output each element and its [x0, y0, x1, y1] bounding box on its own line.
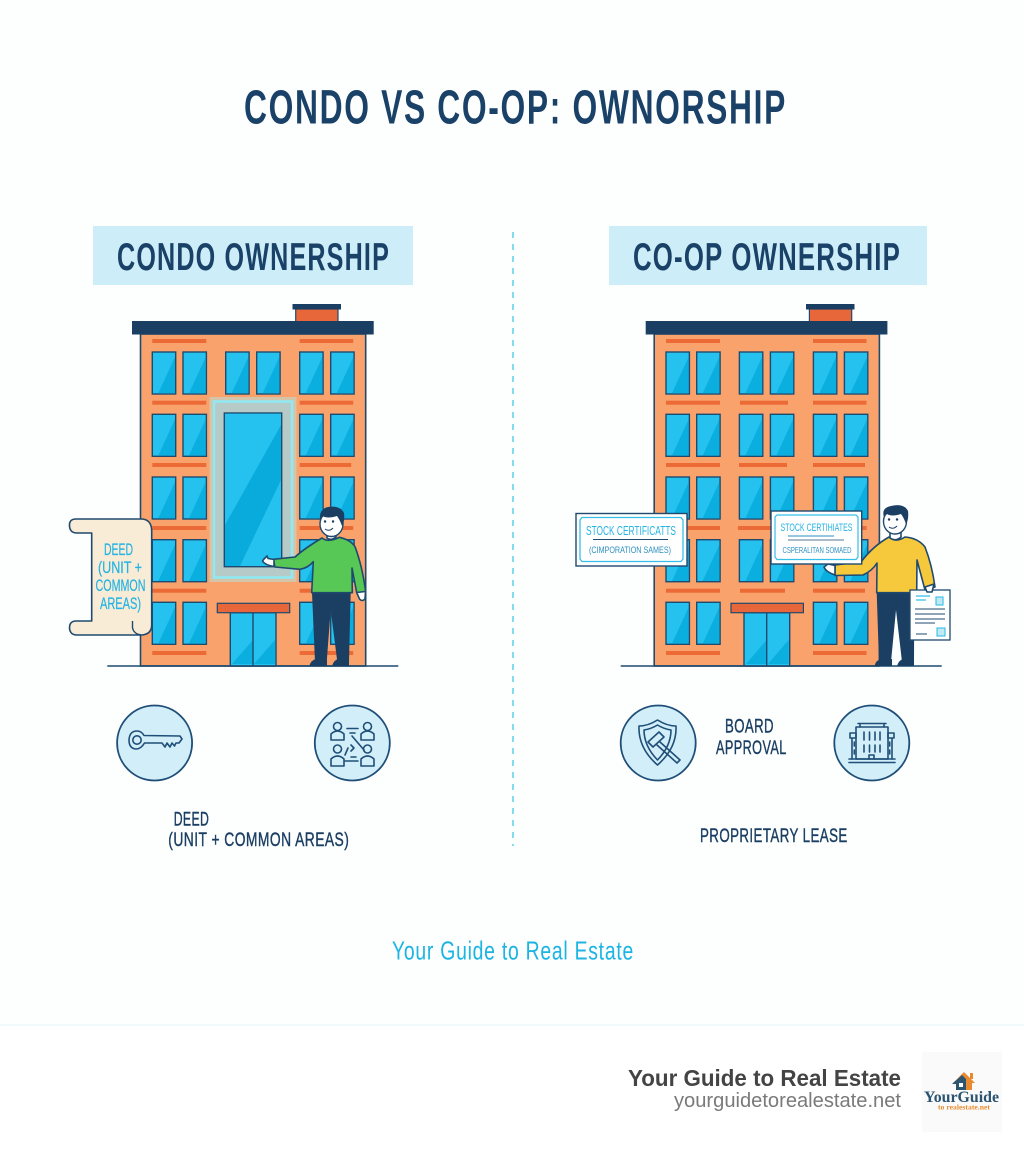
person in yellow sweater [824, 505, 935, 666]
logo [922, 1052, 1002, 1132]
trousers [312, 593, 351, 662]
sweater [835, 537, 935, 593]
floor bands [152, 339, 353, 655]
deed scroll text: AREAS) [100, 594, 141, 613]
label: deed: (UNIT + COMMON AREAS) [168, 830, 349, 851]
windows [152, 352, 354, 644]
hands [262, 556, 366, 600]
logo tagline: to realestate.net [938, 1102, 991, 1112]
windows [666, 352, 868, 644]
right stock certificate [771, 511, 862, 564]
tagline: Your Guide to Real Estate [392, 936, 634, 966]
heading: co-op ownership [609, 226, 927, 285]
hair [883, 505, 908, 524]
left stock certificate [576, 514, 687, 566]
building body [140, 334, 366, 666]
head [890, 530, 901, 540]
panel: co-op ownership [576, 226, 950, 847]
logo wordmark: YourGuide [924, 1089, 999, 1106]
icon: key [117, 706, 192, 780]
ground line [107, 665, 398, 667]
deed scroll [69, 519, 152, 635]
footer [0, 1025, 1024, 1154]
label: board approval: BOARD [725, 716, 774, 738]
icon: community of owners [315, 706, 390, 780]
chimney [806, 304, 854, 322]
roof [132, 321, 374, 334]
chimney [292, 304, 341, 322]
label: board approval: APPROVAL [716, 738, 787, 759]
divider [512, 232, 514, 846]
proprietary lease document [910, 584, 950, 640]
footer brand name: Your Guide to Real Estate [628, 1065, 901, 1091]
deed scroll text [96, 540, 146, 613]
right stock certificate: STOCK CERTIHIATES [780, 522, 852, 534]
icon: shield and gavel [621, 706, 696, 780]
trousers [877, 593, 914, 662]
label: deed [168, 810, 349, 851]
label: board approval [716, 716, 787, 759]
shoes [874, 659, 914, 666]
shoes [309, 659, 349, 666]
illustration: condo building [69, 304, 398, 666]
right stock certificate: CSPERALITAN SOMAED [782, 545, 852, 555]
footer url: yourguidetorealestate.net [674, 1090, 901, 1112]
floor bands [666, 339, 866, 655]
entrance door [731, 603, 803, 666]
left stock certificate: (CIMPORATION SAMES) [589, 545, 671, 556]
label: deed: DEED [174, 810, 209, 830]
head [327, 531, 336, 539]
entrance door [217, 603, 290, 666]
face [325, 520, 333, 523]
panel: condo ownership [69, 226, 413, 851]
icon: apartment building [834, 706, 909, 780]
heading: condo ownership: CONDO OWNERSHIP [117, 236, 390, 279]
ground line [621, 665, 942, 667]
highlighted unit [212, 400, 294, 580]
deed scroll text: (UNIT + [98, 558, 142, 577]
logo house [952, 1072, 975, 1090]
roof [646, 321, 887, 334]
heading: condo ownership [93, 226, 413, 285]
building body [654, 334, 879, 666]
left stock certificate: STOCK CERTIFICATTS [586, 524, 676, 538]
deed scroll text: DEED [104, 540, 133, 559]
deed scroll text: COMMON [96, 576, 146, 595]
label: proprietary lease: PROPRIETARY LEASE [700, 826, 848, 847]
hair [320, 507, 344, 526]
person in green sweater [262, 507, 366, 666]
sweater [273, 537, 366, 593]
illustration: co-op building [576, 304, 950, 666]
face [889, 518, 897, 521]
hand [824, 564, 835, 575]
